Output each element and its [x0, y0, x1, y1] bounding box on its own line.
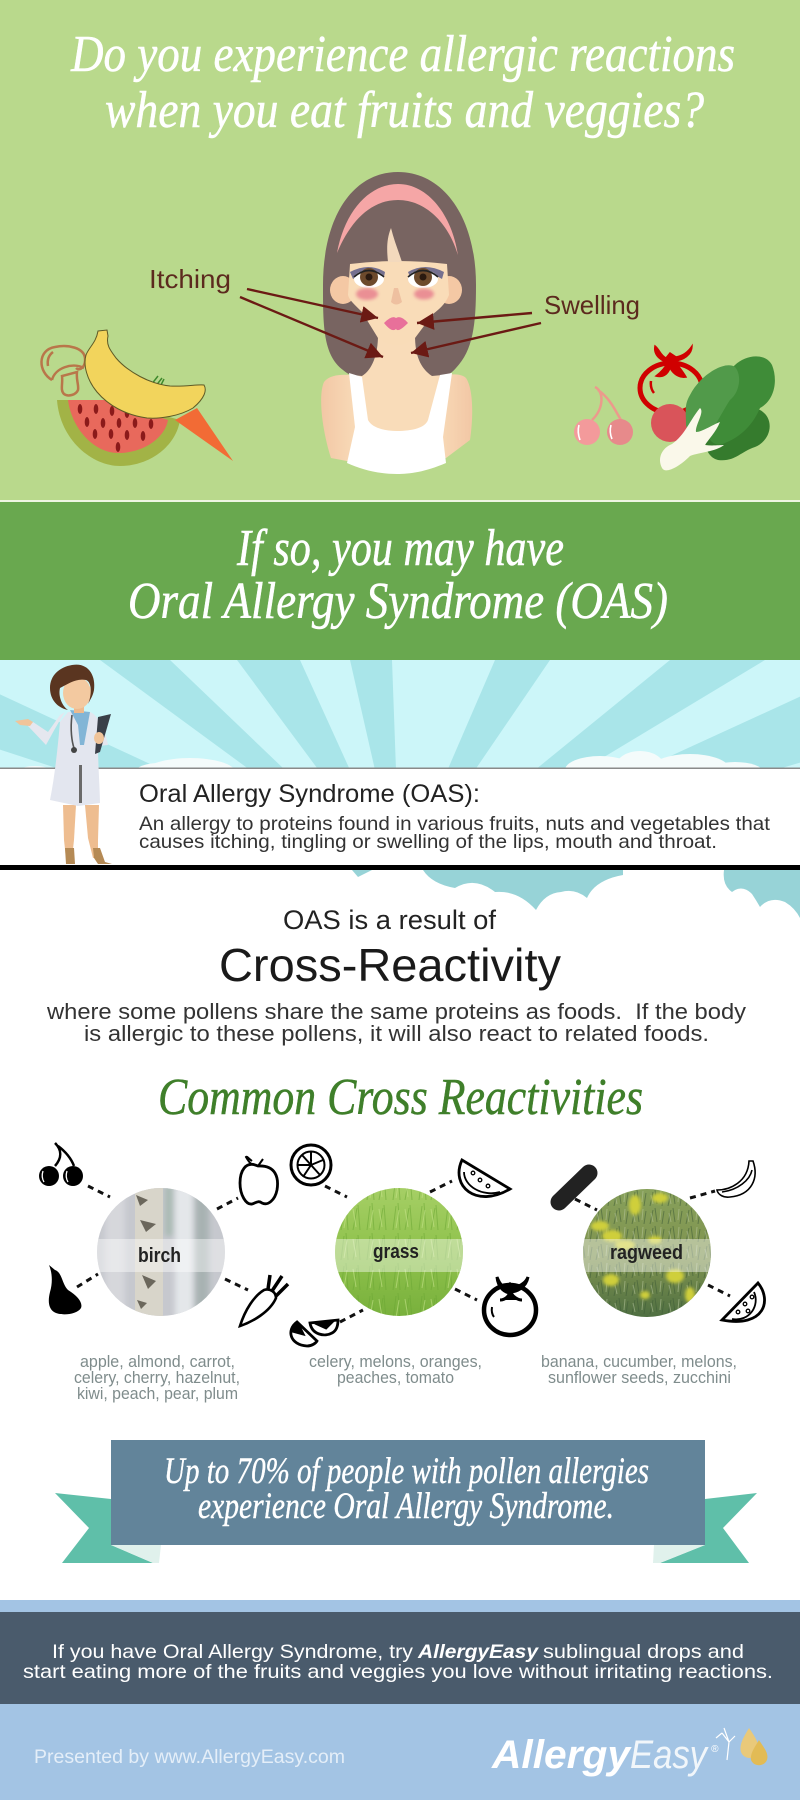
call to action text: start eating more of the fruits and veggies you love without irritating reactions.: [23, 1661, 773, 1683]
ribbon folds: [111, 1545, 161, 1563]
clouds over teal sky: [352, 870, 800, 918]
dark upper leaf: [707, 356, 775, 444]
mushroom: [41, 346, 85, 395]
call to action text: [23, 1641, 773, 1683]
black rule: [0, 865, 800, 870]
icon: watermelon slice: [722, 1283, 765, 1321]
title: when you eat fruits and veggies?: [105, 82, 704, 139]
text: explanation: [46, 999, 746, 1046]
illustration: right food group: [574, 346, 775, 470]
panel: sky with rays: [0, 660, 800, 768]
divider: white line: [0, 500, 800, 502]
face: [63, 677, 91, 709]
carrot: [175, 408, 233, 461]
group: birch: [39, 1143, 288, 1326]
lips: [384, 317, 408, 330]
grass photo: [333, 1186, 465, 1318]
logo: allergyeasy: [491, 1728, 767, 1777]
caption: grass foods: celery, melons, oranges,: [309, 1352, 482, 1371]
panel: definition: [0, 768, 800, 865]
label: swelling: Swelling: [544, 290, 640, 320]
birch photo: [95, 1186, 227, 1318]
coat: [50, 712, 108, 806]
ribbon text: Up to 70% of people with pollen allergies: [164, 1451, 649, 1492]
dashed connectors: [325, 1181, 477, 1322]
hair: [323, 172, 476, 378]
logo wordmark: Easy: [630, 1733, 710, 1777]
sun rays: [0, 660, 800, 768]
logo wordmark: Allergy: [491, 1733, 632, 1777]
seeds: [78, 404, 153, 452]
neck: [74, 703, 84, 713]
icon: pear: [49, 1265, 81, 1314]
heading: cross-reactivity: Cross-Reactivity: [219, 939, 561, 991]
illustration: left food group: [41, 330, 233, 466]
icon: orange slice: [291, 1145, 331, 1185]
red tomato outline: [640, 346, 702, 413]
caption: birch foods: kiwi, peach, pear, plum: [77, 1384, 238, 1403]
icon: peach slices: [291, 1320, 338, 1346]
group: ragweed: [559, 1161, 765, 1321]
icon: tomato: [484, 1277, 536, 1335]
watermelon: [57, 400, 180, 466]
caption: ragweed foods: [541, 1352, 737, 1387]
panel: call to action: [0, 1612, 800, 1704]
shoes: [65, 848, 112, 864]
birch label: birch: [138, 1245, 181, 1267]
arm and hand: [15, 712, 65, 745]
ears: [330, 276, 462, 304]
dark lower leaf: [705, 409, 770, 460]
ragweed photo: [583, 1189, 711, 1317]
caption: ragweed foods: sunflower seeds, zucchini: [548, 1368, 731, 1387]
definition body: An allergy to proteins found in various fruits, nuts and vegetables that: [139, 813, 771, 835]
headband: [337, 184, 458, 255]
tank top: [347, 373, 452, 474]
title: [70, 26, 735, 139]
oil drops: [740, 1728, 767, 1765]
ribbon body: [111, 1440, 705, 1545]
white stalk: [660, 408, 724, 470]
definition heading: Oral Allergy Syndrome (OAS):: [139, 780, 480, 808]
call to action text: sublingual drops and: [543, 1641, 744, 1663]
caption: birch foods: apple, almond, carrot,: [80, 1352, 235, 1371]
text: oas is a result of: OAS is a result of: [283, 905, 496, 935]
banner heading: If so, you may have: [236, 520, 564, 577]
icon: watermelon slice: [459, 1160, 510, 1197]
caption: birch foods: [74, 1352, 240, 1403]
panel: intro background: [0, 0, 800, 500]
presented by: Presented by www.AllergyEasy.com: [34, 1747, 345, 1768]
icon: apple: [240, 1157, 278, 1204]
hair: [50, 665, 94, 710]
caption: grass foods: [309, 1352, 482, 1387]
call to action text: If you have Oral Allergy Syndrome, try: [52, 1641, 413, 1663]
banner heading: Oral Allergy Syndrome (OAS): [128, 573, 668, 630]
definition body: [139, 813, 771, 853]
ragweed label: ragweed: [610, 1242, 683, 1264]
heading: common cross reactivities: Common Cross Reactivities: [158, 1069, 643, 1126]
legs: [63, 805, 99, 858]
light leaf: [686, 365, 739, 440]
clipboard: [95, 714, 111, 754]
apple: [651, 404, 689, 442]
ribbon text: experience Oral Allergy Syndrome.: [198, 1486, 614, 1527]
caption: birch foods: celery, cherry, hazelnut,: [74, 1368, 240, 1387]
coat slit: [79, 765, 82, 803]
dashed connectors: [77, 1186, 248, 1290]
flesh: [68, 400, 168, 453]
ribbon text: [164, 1451, 649, 1527]
definition body: causes itching, tingling or swelling of the lips, mouth and throat.: [139, 831, 717, 853]
icon: cherries: [39, 1143, 83, 1186]
text: explanation: where some pollens share the same proteins as foods. If the body: [46, 999, 746, 1024]
carrot leaves: [151, 376, 164, 387]
logo wordmark: [491, 1733, 719, 1777]
clouds: [24, 751, 760, 768]
group: grass: [291, 1145, 536, 1346]
grass label: grass: [373, 1241, 419, 1263]
call to action text: AllergyEasy: [417, 1641, 539, 1663]
text: explanation: is allergic to these pollens, it will also react to related foods.: [84, 1021, 709, 1046]
icon: banana: [717, 1161, 755, 1197]
face: [348, 261, 449, 345]
icon: carrot: [240, 1275, 288, 1326]
banana: [85, 330, 205, 418]
illustration: girl: [321, 172, 476, 474]
shoulders and neck: [321, 335, 472, 462]
label: itching: Itching: [149, 264, 231, 294]
caption: ragweed foods: banana, cucumber, melons,: [541, 1352, 737, 1371]
ribbon tails: [55, 1493, 153, 1563]
hand on clipboard: [94, 732, 104, 744]
panel: oas banner: [0, 502, 800, 660]
caption: grass foods: peaches, tomato: [337, 1368, 454, 1387]
icon: cucumber: [559, 1173, 589, 1202]
illustration: doctor: [15, 665, 112, 864]
ribbon callout: [55, 1440, 757, 1563]
eyes: [350, 267, 444, 288]
dashed connectors: [575, 1191, 730, 1296]
fringe parting: [387, 228, 402, 262]
cheeks: [356, 288, 434, 300]
nose: [391, 288, 402, 304]
dandelion: [716, 1728, 735, 1760]
stethoscope: [71, 715, 74, 748]
cherries: [574, 387, 633, 445]
banner heading: [128, 520, 668, 630]
blouse: [70, 710, 90, 745]
footer background: [0, 1600, 800, 1800]
logo wordmark: ®: [711, 1744, 719, 1755]
arrows to symptoms: [240, 289, 541, 357]
